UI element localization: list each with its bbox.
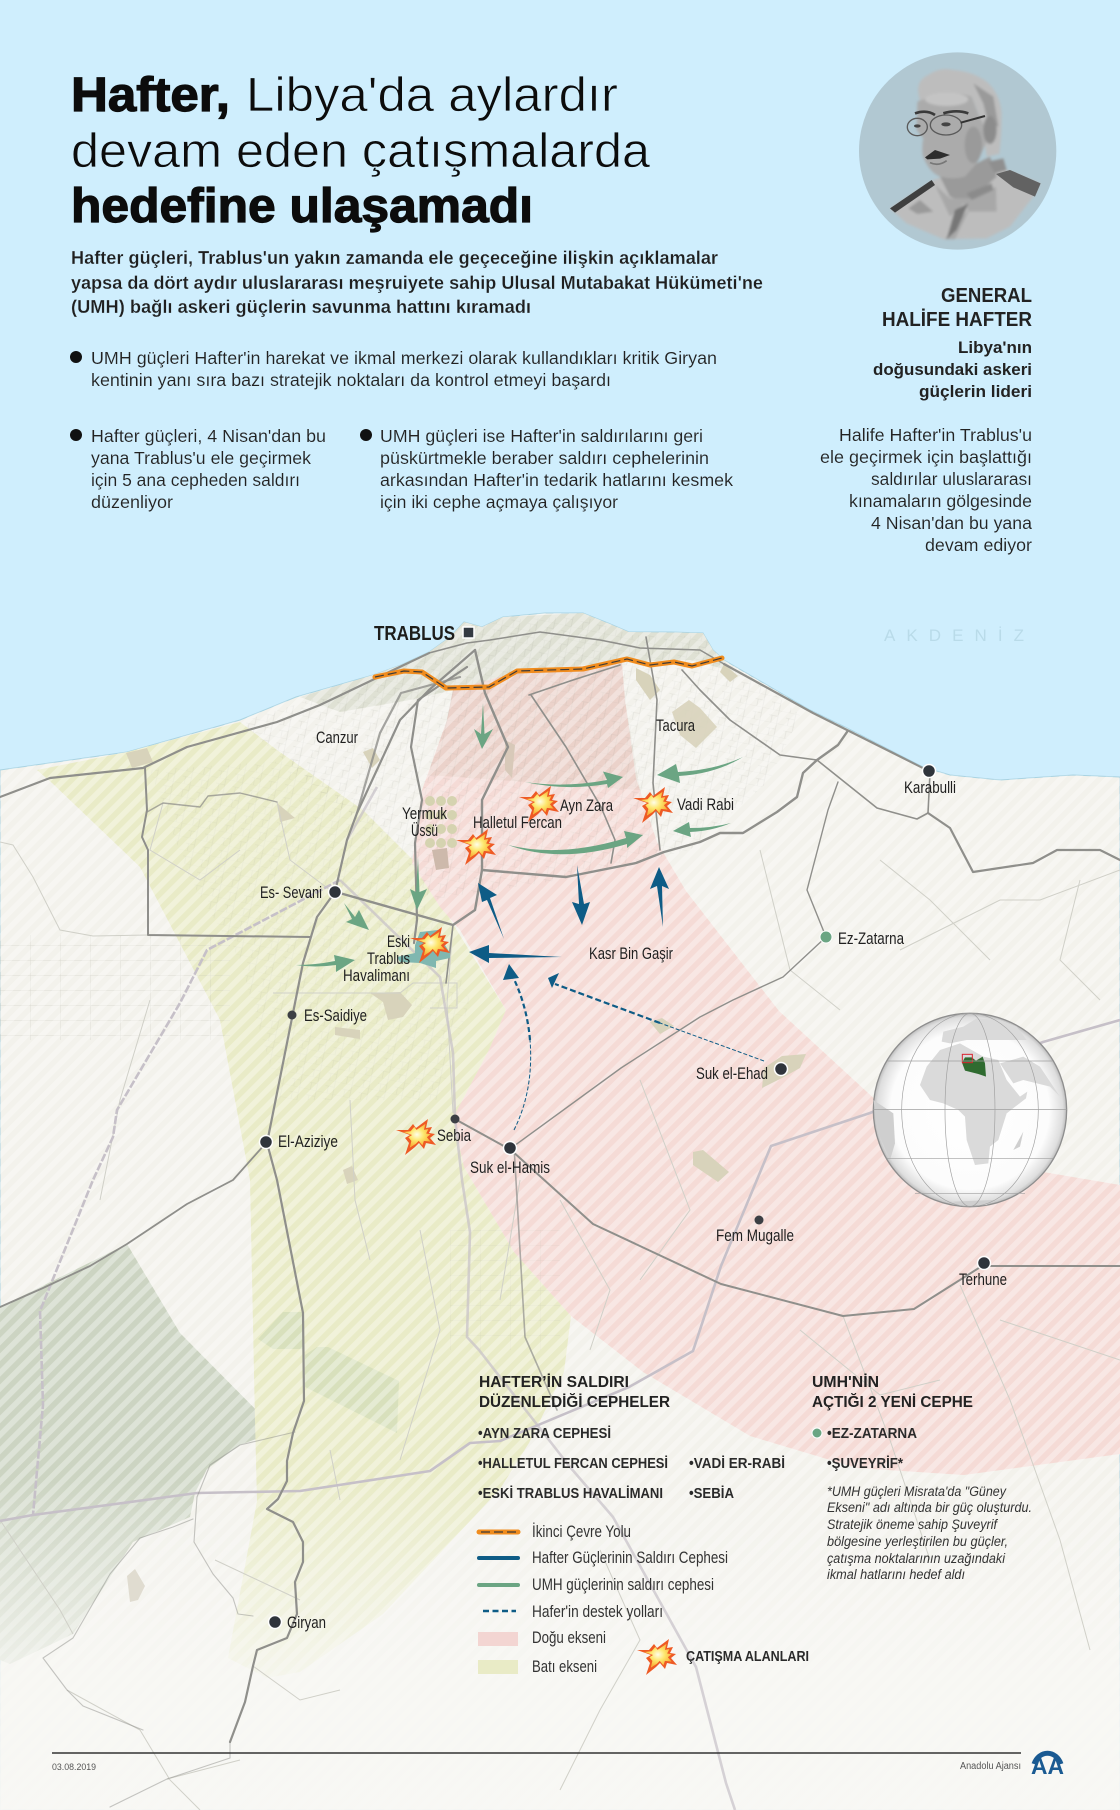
map labels: Ayn Zara xyxy=(560,797,614,815)
map labels: Terhune xyxy=(959,1271,1007,1289)
profile: General Halife Hafter xyxy=(820,285,1033,555)
map labels: Suk el-Ehad xyxy=(696,1065,768,1083)
footer: 03.08.2019 xyxy=(52,1762,96,1773)
Yermuk base fields xyxy=(425,796,457,848)
legend: UMH new fronts: *UMH güçleri Misrata'da "Güney xyxy=(827,1484,1007,1499)
map labels: El-Aziziye xyxy=(278,1133,338,1151)
map labels: TRABLUS xyxy=(374,623,455,645)
legend: Hafter fronts: •VADİ ER-RABİ xyxy=(689,1455,785,1472)
legend: UMH new fronts: Ekseni" adı altında bir güç oluşturdu. xyxy=(827,1500,1032,1515)
map labels: Havalimanı xyxy=(343,967,410,985)
map labels: Fem Mugalle xyxy=(716,1227,794,1245)
legend: key: Batı ekseni xyxy=(532,1658,597,1676)
logo: Anadolu Ajansı: AA xyxy=(1031,1753,1064,1779)
globe locator xyxy=(873,1013,1067,1207)
legend: Hafter fronts: •HALLETUL FERCAN CEPHESİ xyxy=(478,1455,668,1472)
map labels: Vadi Rabi xyxy=(677,796,734,814)
intro text: Hafter güçleri, Trablus'un yakın zamanda ele geçeceğine ilişkin açıklamalar xyxy=(71,248,718,268)
legend: key xyxy=(478,1522,809,1676)
map: Libya northwest base xyxy=(0,610,1120,1810)
legend: UMH new fronts: bölgesine yerleştirilen bu güçler, xyxy=(827,1534,1008,1549)
towns and built-up patches xyxy=(126,664,806,1602)
title: devam eden çatışmalarda xyxy=(71,125,650,178)
profile: General Halife Hafter: devam ediyor xyxy=(925,535,1032,555)
legend: UMH new fronts: •ŞUVEYRİF* xyxy=(827,1455,903,1472)
title: hedefine ulaşamadı xyxy=(71,180,533,233)
footer: Anadolu Ajansı xyxy=(960,1761,1021,1772)
city points xyxy=(260,627,990,1628)
map labels: Giryan xyxy=(287,1614,326,1632)
legend: Hafter fronts: DÜZENLEDİĞİ CEPHELER xyxy=(479,1392,670,1411)
profile: General Halife Hafter: HALİFE HAFTER xyxy=(882,308,1033,331)
title xyxy=(71,69,650,233)
profile: General Halife Hafter: kınamaların gölgesinde xyxy=(849,491,1032,511)
intro text: (UMH) bağlı askeri güçlerin savunma hattını kıramadı xyxy=(71,297,531,317)
map labels: Canzur xyxy=(316,729,358,747)
pipelines and purple corridors xyxy=(0,787,1120,1810)
profile: General Halife Hafter: doğusundaki askeri xyxy=(873,361,1032,379)
profile: General Halife Hafter: saldırılar uluslararası xyxy=(871,469,1032,489)
legend: UMH new fronts xyxy=(812,1373,1032,1582)
title: Libya'da aylardır xyxy=(246,69,618,122)
map labels: Kasr Bin Gaşir xyxy=(589,945,673,963)
legend: key: İkinci Çevre Yolu xyxy=(532,1522,631,1541)
map labels: Sebia xyxy=(437,1127,472,1145)
map labels: Trablus xyxy=(367,950,410,968)
profile: General Halife Hafter: ele geçirmek için başlattığı xyxy=(820,447,1032,467)
bullet: 5 fronts xyxy=(70,426,326,512)
legend: UMH new fronts: UMH'NİN xyxy=(812,1373,879,1391)
bullet: two new fronts: UMH güçleri ise Hafter'in saldırılarını geri xyxy=(380,426,703,446)
map labels: Yermuk xyxy=(402,805,448,823)
legend: key: UMH güçlerinin saldırı cephesi xyxy=(532,1576,714,1594)
bullet: two new fronts xyxy=(360,426,733,512)
legend: key: Hafer'in destek yolları xyxy=(532,1603,663,1621)
bullet: two new fronts: için iki cephe açmaya çalışıyor xyxy=(380,492,618,512)
legend: key: Hafter Güçlerinin Saldırı Cephesi xyxy=(532,1549,728,1567)
map labels: Ez-Zatarna xyxy=(838,930,905,948)
map labels: AKDENİZ xyxy=(884,626,1024,645)
legend: UMH new fronts: AÇTIĞI 2 YENİ CEPHE xyxy=(812,1392,973,1411)
bullet: two new fronts: püskürtmekle beraber saldırı cephelerinin xyxy=(380,448,709,468)
legend: UMH new fronts: Stratejik öneme sahip Şuveyrif xyxy=(827,1517,998,1532)
map labels: Üssü xyxy=(411,822,438,840)
main roads xyxy=(0,632,1120,1807)
map labels: Suk el-Hamis xyxy=(470,1159,550,1177)
legend: Hafter fronts: •AYN ZARA CEPHESİ xyxy=(478,1425,611,1442)
bullet: Giryan: UMH güçleri Hafter'in harekat ve ikmal merkezi olarak kullandıkları kritik Giryan xyxy=(91,348,717,368)
title: Hafter, xyxy=(71,69,230,122)
bullet: 5 fronts: için 5 ana cepheden saldırı xyxy=(91,470,300,490)
UMH green arrows xyxy=(296,703,743,972)
ring road: İkinci Çevre Yolu xyxy=(375,658,722,688)
supply routes: dashed arrows xyxy=(503,964,764,1130)
legend: UMH new fronts: •EZ-ZATARNA xyxy=(827,1426,917,1442)
map labels: Es- Sevani xyxy=(260,884,322,902)
map labels xyxy=(260,623,1024,1632)
secondary roads xyxy=(0,802,1120,1810)
Hafter blue arrows xyxy=(469,865,669,963)
bullet: two new fronts: arkasından Hafter'in tedarik hatlarını kesmek xyxy=(380,470,733,490)
intro text: yapsa da dört aydır uluslararası meşruiyete sahip Ulusal Mutabakat Hükümeti'ne xyxy=(71,273,763,293)
legend: Hafter fronts: HAFTER’İN SALDIRI xyxy=(479,1373,629,1391)
profile: General Halife Hafter: Halife Hafter'in Trablus'u xyxy=(839,425,1032,445)
bullet: 5 fronts: Hafter güçleri, 4 Nisan'dan bu xyxy=(91,426,326,446)
legend: key: Doğu ekseni xyxy=(532,1629,606,1647)
legend: UMH new fronts: çatışma noktalarının uzağındaki xyxy=(827,1551,1006,1566)
legend: UMH new fronts: ikmal hatlarını hedef aldı xyxy=(827,1567,965,1582)
profile: General Halife Hafter: Libya'nın xyxy=(958,339,1032,357)
map labels: Halletul Fercan xyxy=(473,814,562,832)
legend: Hafter fronts: •ESKİ TRABLUS HAVALİMANI xyxy=(478,1485,663,1502)
legend: Hafter fronts: •SEBİA xyxy=(689,1485,734,1502)
map labels: Tacura xyxy=(656,717,696,735)
airport xyxy=(397,930,450,968)
legend: key: ÇATIŞMA ALANLARI xyxy=(686,1649,809,1665)
map labels: Es-Saidiye xyxy=(304,1007,367,1025)
map labels: Eski xyxy=(387,933,410,951)
bullet: 5 fronts: yana Trablus'u ele geçirmek xyxy=(91,448,311,468)
clash markers xyxy=(396,786,673,1155)
intro text xyxy=(71,248,763,317)
map labels: Karabulli xyxy=(904,779,956,797)
footer xyxy=(52,1753,1021,1773)
bullet: Giryan: kentinin yanı sıra bazı stratejik noktaları da kontrol etmeyi başardı xyxy=(91,370,611,390)
profile: General Halife Hafter: güçlerin lideri xyxy=(919,383,1032,401)
bullet: 5 fronts: düzenliyor xyxy=(91,492,173,512)
legend: Hafter fronts xyxy=(478,1373,785,1502)
bullet: Giryan xyxy=(70,348,717,390)
portrait: Halife Hafter xyxy=(859,52,1056,250)
profile: General Halife Hafter: GENERAL xyxy=(941,285,1032,307)
profile: General Halife Hafter: 4 Nisan'dan bu yana xyxy=(871,513,1032,533)
